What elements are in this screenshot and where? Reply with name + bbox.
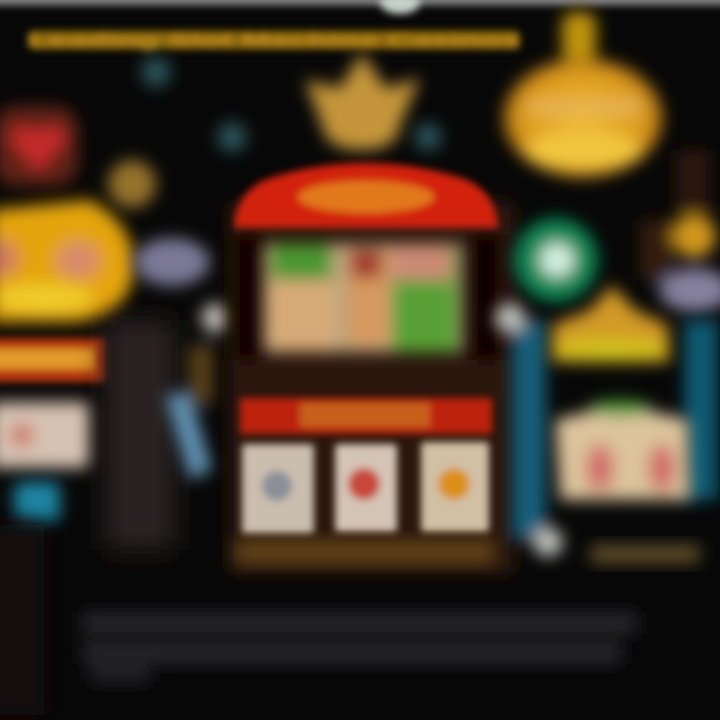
upper reel window [264,244,462,352]
hanging gold lamp [503,12,663,178]
machine body [228,200,516,575]
left heart lamp [0,106,156,208]
caption block [82,612,637,682]
left reel [0,402,90,468]
title: Leading Slot Machine Casinos [28,30,520,52]
teal columns [495,303,718,557]
left blue button [14,482,60,522]
left red and orange bar [0,338,106,382]
left lever lights [134,238,231,480]
upper reel right [392,246,458,352]
right small lamp [640,150,720,312]
title [28,30,520,52]
centre slot machine [228,163,516,575]
centre crown [305,52,420,150]
lower red banner [240,398,492,434]
right crown top [552,285,670,362]
upper reel middle [346,248,390,346]
green glowing light [514,218,598,302]
right slot machine [495,150,720,564]
left slot machine [0,106,231,715]
left machine shadow body [0,320,175,715]
lower reels [242,442,489,534]
right machine caption [590,544,700,564]
upper reel left [268,246,334,350]
machine top red arch [234,163,498,228]
decorative stars [141,57,442,152]
left gold face [0,200,134,322]
right reels [555,400,690,500]
machine base [236,540,494,564]
top light strip [0,0,720,14]
